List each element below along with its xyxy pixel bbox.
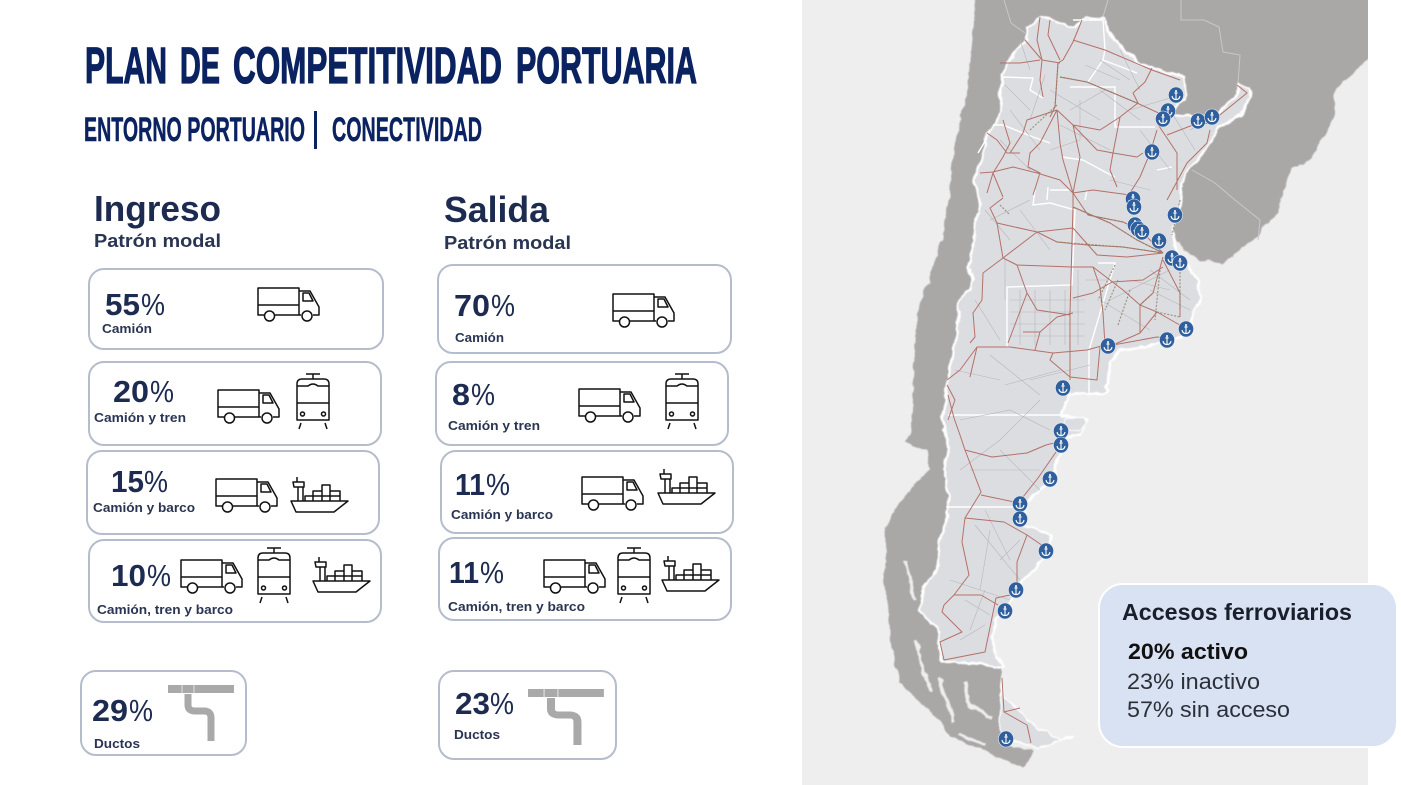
card: 20% camión y tren: % — [150, 374, 174, 409]
card: 23% ductos: Ductos — [454, 727, 500, 742]
card: 15% camión y barco: 15 — [111, 464, 144, 499]
card: 20% camión y tren: Camión y tren — [94, 410, 186, 425]
card: 70% camión: Camión — [455, 330, 504, 345]
card: 10% camión, tren y barco — [89, 540, 381, 622]
title: PORTUARIA — [516, 37, 697, 94]
Argentina landmass — [919, 17, 1252, 747]
subtitle: ENTORNO PORTUARIO — [84, 111, 305, 149]
card: 15% camión y barco — [87, 451, 379, 534]
card: 20% camión y tren: 20 — [113, 374, 149, 409]
title: COMPETITIVIDAD — [233, 37, 502, 94]
card: 55% camión: Camión — [102, 321, 152, 336]
minor roads — [950, 40, 1220, 640]
card: 11% camión, tren y barco: 11 — [449, 555, 479, 590]
card: 29% ductos: % — [129, 693, 153, 728]
callout: accesos ferroviarios: 23% inactivo — [1127, 669, 1260, 694]
heading: salida: Salida — [444, 189, 550, 230]
provincial borders — [946, 20, 1172, 507]
card: 8% camión y tren: % — [471, 377, 495, 412]
card: 10% camión, tren y barco: % — [147, 558, 171, 593]
card: 23% ductos: % — [490, 686, 514, 721]
callout: accesos ferroviarios: 20% activo — [1128, 639, 1248, 664]
card: 15% camión y barco: % — [144, 464, 168, 499]
card: 23% ductos — [439, 671, 616, 759]
card: 70% camión — [438, 265, 731, 353]
card: 8% camión y tren — [436, 362, 728, 445]
neighbouring countries — [883, 0, 1380, 768]
card: 10% camión, tren y barco: 10 — [111, 558, 146, 593]
card: 11% camión, tren y barco — [439, 538, 731, 620]
card: 11% camión y barco: 11 — [455, 467, 485, 502]
card: 29% ductos: Ductos — [94, 736, 140, 751]
panel: ingreso — [81, 188, 383, 755]
card: 55% camión — [89, 269, 383, 349]
subheading: patrón modal salida: Patrón modal — [444, 233, 571, 253]
title: DE — [180, 37, 220, 94]
card: 11% camión, tren y barco: Camión, tren y barco — [448, 599, 585, 614]
callout: accesos ferroviarios: Accesos ferroviarios — [1122, 599, 1352, 625]
card: 55% camión: 55 — [105, 287, 140, 322]
card: 20% camión y tren — [89, 362, 381, 445]
rail network — [940, 17, 1247, 743]
card: 8% camión y tren: Camión y tren — [448, 418, 540, 433]
heading: ingreso: Ingreso — [94, 188, 221, 229]
card: 10% camión, tren y barco: Camión, tren y barco — [97, 602, 233, 617]
callout: accesos ferroviarios: 57% sin acceso — [1127, 697, 1290, 722]
international borders — [1004, 0, 1260, 240]
card: 11% camión y barco: Camión y barco — [451, 507, 553, 522]
card: 15% camión y barco: Camión y barco — [93, 500, 195, 515]
subheading: patrón modal ingreso: Patrón modal — [94, 231, 221, 251]
panel: map of Argentina — [802, 0, 1380, 785]
card: 70% camión: % — [491, 288, 515, 323]
card: 11% camión y barco: % — [486, 467, 510, 502]
card: 55% camión: % — [141, 287, 165, 322]
panel: salida — [436, 189, 733, 759]
card: 23% ductos: 23 — [455, 686, 490, 721]
card: 11% camión, tren y barco: % — [480, 555, 504, 590]
subtitle: CONECTIVIDAD — [332, 111, 482, 149]
callout: accesos ferroviarios — [1099, 584, 1397, 747]
card: 70% camión: 70 — [454, 288, 490, 323]
card: 8% camión y tren: 8 — [452, 377, 470, 412]
card: 11% camión y barco — [441, 451, 733, 533]
card: 29% ductos — [81, 671, 246, 755]
title: PLAN — [85, 37, 167, 94]
port markers — [997, 87, 1220, 747]
card: 29% ductos: 29 — [92, 693, 128, 728]
